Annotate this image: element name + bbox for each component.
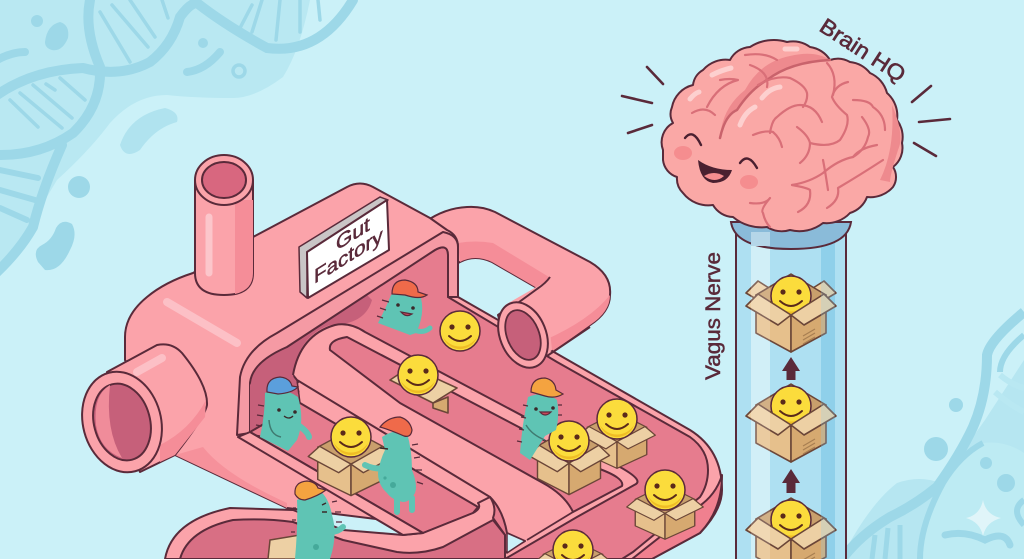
bacterium: orange hat at box <box>517 378 563 460</box>
chimney <box>195 155 253 295</box>
tube box 3 <box>746 498 836 559</box>
bacterium: orange hat carrying parcel <box>268 481 343 559</box>
tube box 2 <box>746 384 836 462</box>
boxes and smileys on the belt <box>308 311 703 559</box>
lane two floor <box>330 337 622 512</box>
rear lobe shade <box>720 54 830 138</box>
box 3 <box>579 412 655 468</box>
eyes <box>685 134 757 168</box>
interior shade <box>250 295 372 433</box>
smile 5 <box>645 470 685 510</box>
tube sheen <box>751 232 835 559</box>
label: Vagus Nerve: Vagus Nerve <box>702 252 725 380</box>
bacterium: red hat lower <box>365 417 423 512</box>
brain <box>662 40 903 231</box>
tube collar <box>731 222 851 249</box>
cheeks <box>674 146 692 160</box>
arrow up 2 <box>782 469 800 493</box>
box 2 <box>308 429 394 496</box>
lane three wall <box>250 373 300 432</box>
box 6 <box>535 540 611 559</box>
brain folds <box>692 54 885 227</box>
body shadow <box>175 447 287 508</box>
lower oval belt <box>165 497 505 559</box>
sign: Gut Factory: Factory <box>314 224 383 289</box>
brain highlights <box>690 49 797 125</box>
box 4 <box>528 428 610 495</box>
brain outline <box>662 40 903 231</box>
lane three floor <box>250 403 478 533</box>
lower rail <box>238 432 423 535</box>
tube glass <box>736 228 846 559</box>
gut factory <box>71 155 722 559</box>
smile loose <box>440 311 480 351</box>
vagus nerve tube <box>731 222 851 559</box>
back loop pipe <box>425 207 610 355</box>
sign: Gut Factory: Gut <box>336 213 370 256</box>
smile 3 <box>597 399 637 439</box>
tube walls <box>736 232 846 559</box>
outer right belt side <box>632 475 722 559</box>
smile 2 <box>331 417 371 457</box>
sign: Gut Factory <box>299 197 389 298</box>
wide belt divider <box>293 324 638 559</box>
label: Brain HQ: Brain HQ <box>815 13 910 87</box>
main floor <box>250 247 708 559</box>
smile 6 <box>553 530 593 559</box>
front lip <box>237 232 458 435</box>
highlight lines <box>167 302 237 343</box>
bacterium: blue hat <box>255 377 309 451</box>
loop pipe flange <box>489 277 590 375</box>
mouth <box>698 160 732 183</box>
box 5 <box>627 485 703 539</box>
bacterium: red hat top <box>377 280 430 335</box>
background: DNA top left <box>0 0 353 275</box>
sparkle <box>966 500 1001 536</box>
side pipe <box>71 344 207 481</box>
sky gap <box>507 533 525 553</box>
smile 1 <box>398 355 438 395</box>
tube box 1 <box>746 274 836 352</box>
factory body <box>125 184 722 559</box>
excitement rays <box>622 67 950 156</box>
background: DNA bottom right <box>840 312 1024 559</box>
box 1 <box>390 370 457 413</box>
arrow up 1 <box>782 357 800 380</box>
smile 4 <box>549 421 589 461</box>
